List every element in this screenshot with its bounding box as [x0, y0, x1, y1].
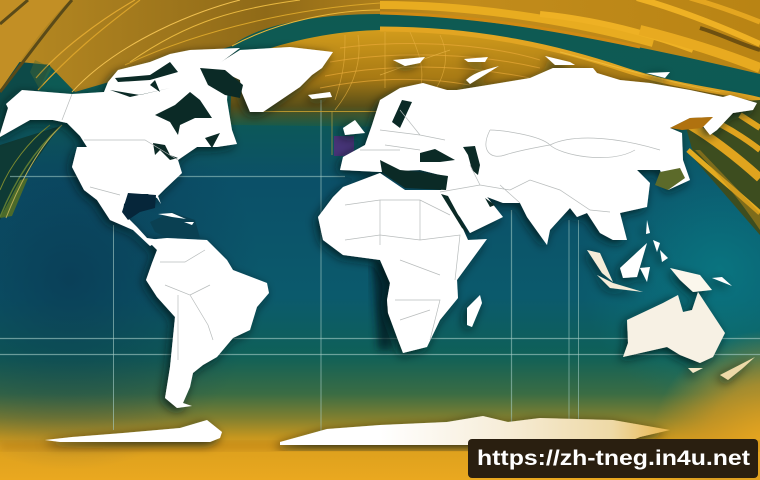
Madagascar	[467, 295, 482, 327]
Philippines	[653, 240, 668, 262]
Hispaniola	[184, 222, 194, 225]
Sulawesi	[640, 267, 650, 282]
graticule lines	[0, 100, 760, 432]
dark inland seas	[110, 62, 713, 238]
inner golden dome with grid	[230, 29, 760, 140]
Greenland	[213, 47, 333, 112]
Borneo	[620, 243, 647, 278]
Mediterranean	[380, 160, 448, 190]
North America	[0, 48, 240, 246]
right gold stripes	[680, 100, 760, 235]
Baffin Bay	[200, 68, 243, 98]
country borders	[62, 94, 660, 360]
Great Lakes	[153, 143, 178, 160]
Gulf of Mexico	[122, 193, 156, 220]
left green arcs	[0, 125, 62, 220]
Red Sea	[441, 194, 468, 233]
purple glow off Europe	[334, 136, 354, 156]
Hudson Bay	[155, 92, 212, 135]
Persian Gulf	[485, 198, 495, 207]
southern lands	[467, 240, 755, 380]
Caspian Sea	[463, 146, 480, 175]
Africa	[318, 173, 487, 353]
Black Sea	[420, 149, 455, 162]
New Zealand	[720, 357, 755, 380]
Sea of Okhotsk warm	[670, 117, 713, 130]
Baltic	[392, 100, 412, 128]
South America	[146, 238, 269, 408]
Hudson Strait shade	[205, 133, 220, 148]
Islands	[343, 120, 365, 135]
top golden arc bands	[0, 0, 760, 140]
Arctic channels	[110, 62, 178, 97]
Eurasia	[340, 68, 757, 245]
Caribbean	[150, 212, 200, 238]
Antarctica west	[45, 420, 222, 442]
shadow west of Africa	[372, 262, 392, 350]
URL badge	[468, 439, 758, 478]
Sumatra and Java	[587, 250, 643, 292]
Australia	[623, 292, 725, 363]
Cuba	[158, 213, 186, 219]
Antarctica centre	[280, 416, 670, 445]
Korea and Japan shade	[655, 168, 685, 190]
New Guinea	[670, 268, 712, 292]
Tasmania	[688, 368, 703, 373]
URL badge: https://zh-tneg.in4u.net	[477, 447, 750, 470]
